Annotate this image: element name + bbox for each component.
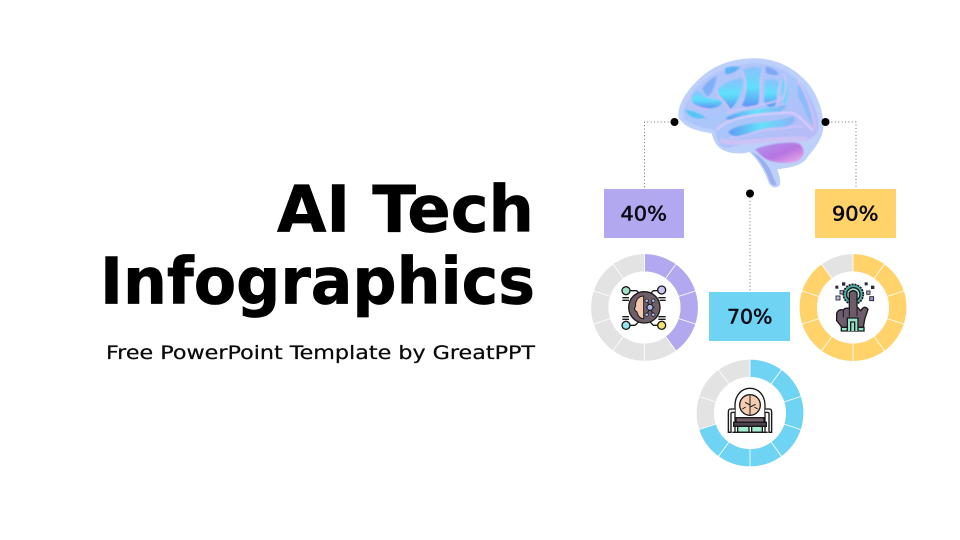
icon: AI head with nodes <box>622 286 666 329</box>
label text 40%: 40% <box>620 203 667 226</box>
label: 70% <box>709 292 790 341</box>
label: 40% <box>604 189 684 238</box>
icon: iridescent brain <box>678 58 823 187</box>
label: 90% <box>815 189 896 238</box>
connector dot: left <box>670 118 678 126</box>
connector: right dotted line <box>828 122 856 189</box>
label text 90%: 90% <box>832 203 878 226</box>
donut chart: 90% <box>801 252 905 362</box>
label text 70%: 70% <box>727 306 772 329</box>
brain silhouette <box>678 58 823 187</box>
subtitle: Free PowerPoint Template by GreatPPT <box>106 342 535 364</box>
icon: hand touching digital button <box>835 282 874 331</box>
connector: centre dotted line <box>749 194 751 292</box>
title line: Infographics: Infographics <box>100 244 535 320</box>
connector dot: right <box>822 118 830 126</box>
brain shading <box>683 63 818 148</box>
label box blue <box>709 292 790 341</box>
label box purple <box>604 189 684 238</box>
donut chart: 40% <box>592 252 697 362</box>
connector: left dotted line <box>644 122 672 189</box>
title line: AI Tech: AI Tech <box>277 172 534 248</box>
label box yellow <box>815 189 896 238</box>
icon: brain in capsule <box>728 388 772 432</box>
connector dot: centre <box>746 190 754 198</box>
cerebellum <box>755 143 804 163</box>
donut chart: 70% <box>698 358 802 468</box>
brain stem <box>752 152 777 185</box>
title <box>100 172 535 320</box>
